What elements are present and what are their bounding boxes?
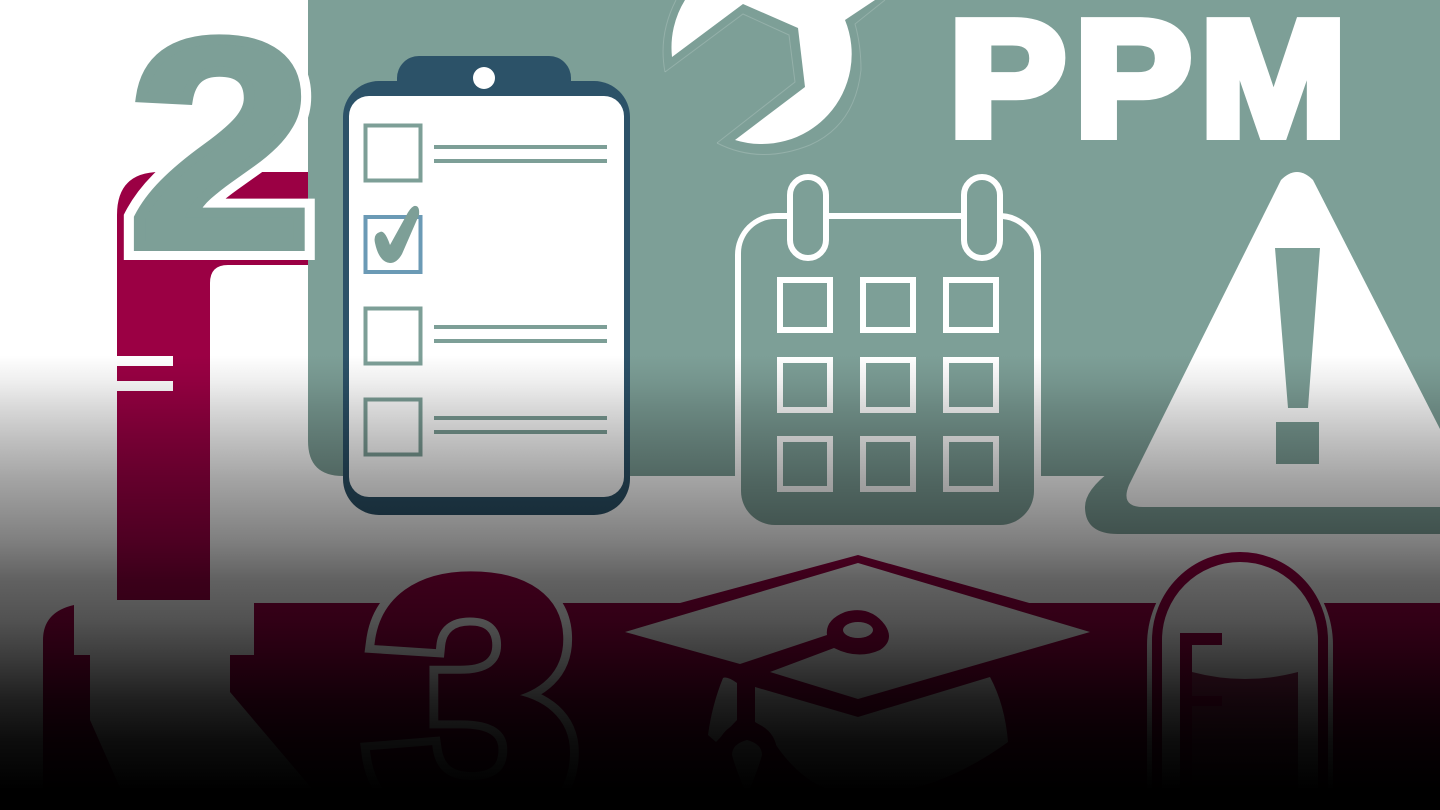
- icon: calendar: [735, 177, 1041, 531]
- icon: wrench: [663, 0, 885, 155]
- icon: graduation cap: [625, 555, 1090, 795]
- icon: warning triangle: [1085, 172, 1440, 534]
- checkbox two with check mark: [366, 206, 420, 272]
- panel: lower crimson band: [43, 603, 1440, 810]
- checkbox three: [366, 308, 607, 364]
- checkbox one: [366, 126, 607, 180]
- checkbox four: [366, 400, 607, 454]
- panel: crimson pipe: [117, 172, 308, 600]
- panel: teal background block: [308, 0, 1440, 476]
- overlay: dark vertical fade: [0, 355, 1440, 810]
- icon: clipboard: [343, 56, 630, 515]
- icon: capsule gauge: [1147, 548, 1333, 810]
- calendar day grid: [780, 280, 996, 489]
- icon: pipe bars: [117, 356, 173, 391]
